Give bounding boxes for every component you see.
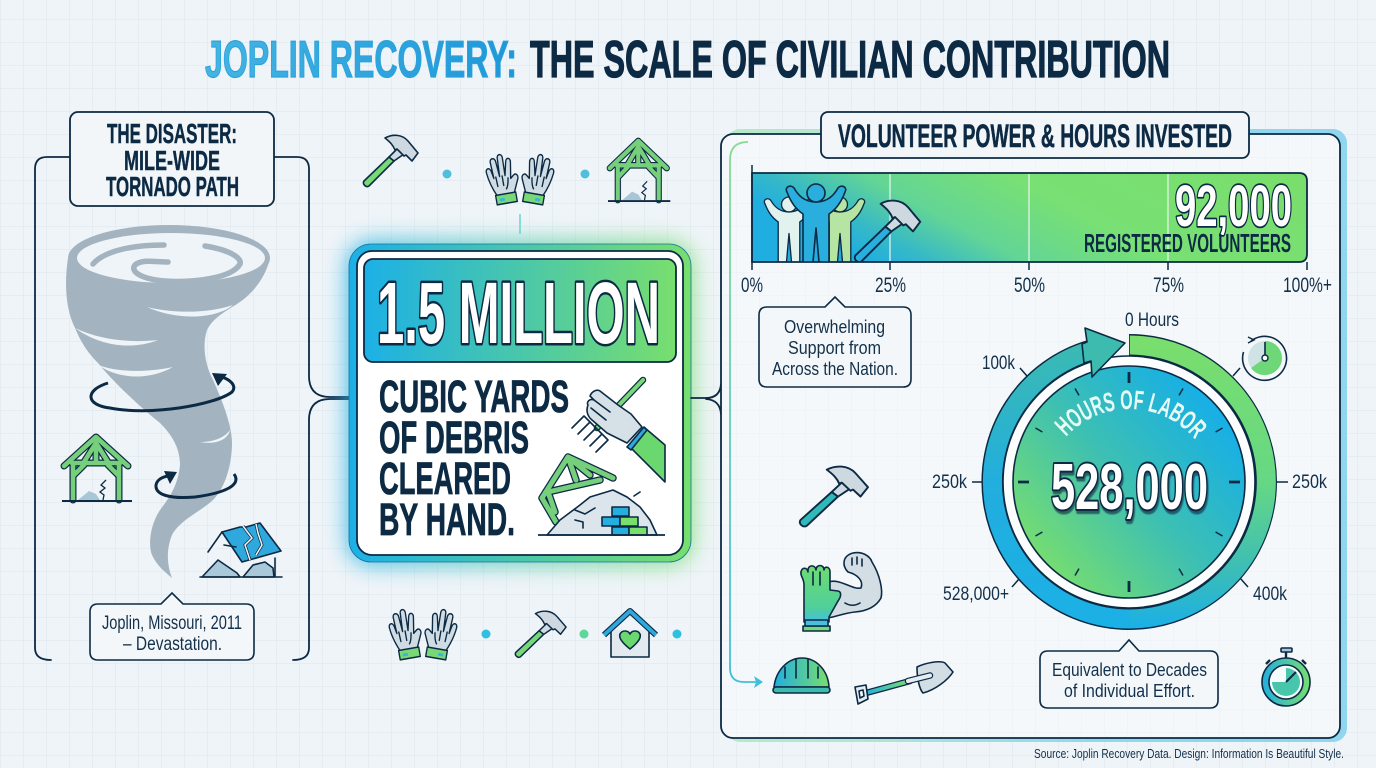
callout: equivalent to decades: of Individual Effort. <box>1064 680 1195 701</box>
arrow: gauge head <box>1082 328 1125 377</box>
callout: equivalent to decades: Equivalent to Decades <box>1052 659 1207 680</box>
icon row: top <box>363 135 670 234</box>
dot <box>482 630 490 638</box>
panel bracket <box>35 157 350 660</box>
connector tick <box>519 214 521 234</box>
heading: volunteer power <box>821 112 1249 158</box>
label: hours of labor: HOURS OF LABOR <box>1054 390 1206 440</box>
banner: 1.5 million <box>364 259 676 362</box>
callout: overwhelming support <box>759 297 911 387</box>
axis labels: 0% <box>741 274 763 297</box>
arrow: side flow line <box>730 142 763 688</box>
panel body <box>357 251 683 555</box>
heading: the disaster: TORNADO PATH <box>106 171 239 202</box>
icon: rotation arrow lower <box>156 471 236 498</box>
gauge scale labels: 100k <box>982 353 1015 374</box>
panel: the disaster <box>35 112 350 660</box>
gauge scale labels: 528,000+ <box>943 584 1009 605</box>
gauge scale labels: 250k <box>1292 472 1327 493</box>
icon: rotation arrow upper <box>91 373 234 411</box>
icon: teal hammer <box>800 467 868 526</box>
heading: the disaster <box>70 112 274 206</box>
gauge scale labels: 250k <box>932 472 967 493</box>
dot <box>442 170 452 178</box>
icon: destroyed house <box>200 523 282 577</box>
callout: overwhelming support: Overwhelming <box>784 316 885 337</box>
axis labels: 25% <box>875 274 906 297</box>
icon: house with heart <box>604 611 656 657</box>
bar gridlines <box>890 174 1168 261</box>
icon: small timer <box>1243 336 1287 380</box>
axis labels: 100%+ <box>1283 274 1332 297</box>
callout: equivalent to decades <box>1040 640 1218 708</box>
title: JOPLIN RECOVERY: <box>205 31 517 89</box>
chart: volunteer bar <box>741 165 1332 297</box>
icon: hard hat <box>773 658 830 693</box>
value: 528,000: 528,000 <box>1051 450 1208 523</box>
gauge scale labels <box>932 310 1327 605</box>
callout: overwhelming support: Support from <box>788 337 881 358</box>
icon: house frame <box>608 141 670 201</box>
bar track <box>752 173 1307 262</box>
icon row: bottom <box>387 607 682 661</box>
axis labels: 50% <box>1014 274 1045 297</box>
title <box>205 31 1170 89</box>
value: 92,000: 92,000 <box>1175 174 1292 239</box>
text: cubic yards of debris: BY HAND. <box>379 494 515 545</box>
callout: Joplin, Missouri: – Devastation. <box>123 634 222 655</box>
axis labels <box>741 274 1332 297</box>
text: cubic yards of debris <box>379 371 569 545</box>
gauge scale labels: 0 Hours <box>1125 310 1179 331</box>
axis labels: 75% <box>1153 274 1184 297</box>
icon: bar hammer <box>855 201 920 262</box>
icon: volunteers <box>764 184 865 262</box>
dot <box>672 630 682 638</box>
callout: Joplin, Missouri <box>90 593 254 660</box>
icon: shovel <box>855 662 953 704</box>
connector: center to right panel <box>691 384 721 414</box>
gauge scale labels: 400k <box>1253 584 1287 605</box>
icon: stopwatch <box>1262 648 1310 706</box>
callout: Joplin, Missouri: Joplin, Missouri, 2011 <box>102 613 242 634</box>
gauge ring <box>992 345 1266 619</box>
axis ticks <box>752 165 1307 270</box>
panel border <box>349 244 691 562</box>
icon: glove and bicep <box>801 553 882 631</box>
panel shadow <box>726 129 1347 742</box>
banner: 1.5 million: 1.5 MILLION <box>377 265 660 362</box>
dot <box>580 630 588 638</box>
icon: gloves <box>387 607 459 661</box>
panel frame <box>721 134 1340 738</box>
icon: damaged house frame <box>62 437 132 501</box>
text: cubic yards of debris: OF DEBRIS <box>379 412 529 463</box>
panel glow <box>346 240 694 566</box>
icon: tornado <box>66 225 270 578</box>
dot <box>580 170 590 178</box>
gauge inner disc <box>1003 356 1255 608</box>
text: cubic yards of debris: CUBIC YARDS <box>379 371 569 422</box>
icon: hammer <box>363 135 418 187</box>
callout: overwhelming support: Across the Nation. <box>772 358 898 379</box>
gauge outer ticks <box>972 368 1288 587</box>
icon: gloved hand with rake <box>572 380 665 482</box>
icon: hammer <box>515 611 566 657</box>
heading: the disaster: MILE-WIDE <box>124 145 220 176</box>
icon: debris pile <box>538 457 665 535</box>
panel: key figure <box>346 240 694 566</box>
text: cubic yards of debris: CLEARED <box>379 453 511 504</box>
panel: volunteer power and hours <box>720 111 1347 742</box>
heading: the disaster: THE DISASTER: <box>107 118 237 149</box>
icon: gloves <box>484 152 556 206</box>
chart: hours gauge <box>932 310 1327 630</box>
gauge dial ticks <box>1036 388 1222 576</box>
